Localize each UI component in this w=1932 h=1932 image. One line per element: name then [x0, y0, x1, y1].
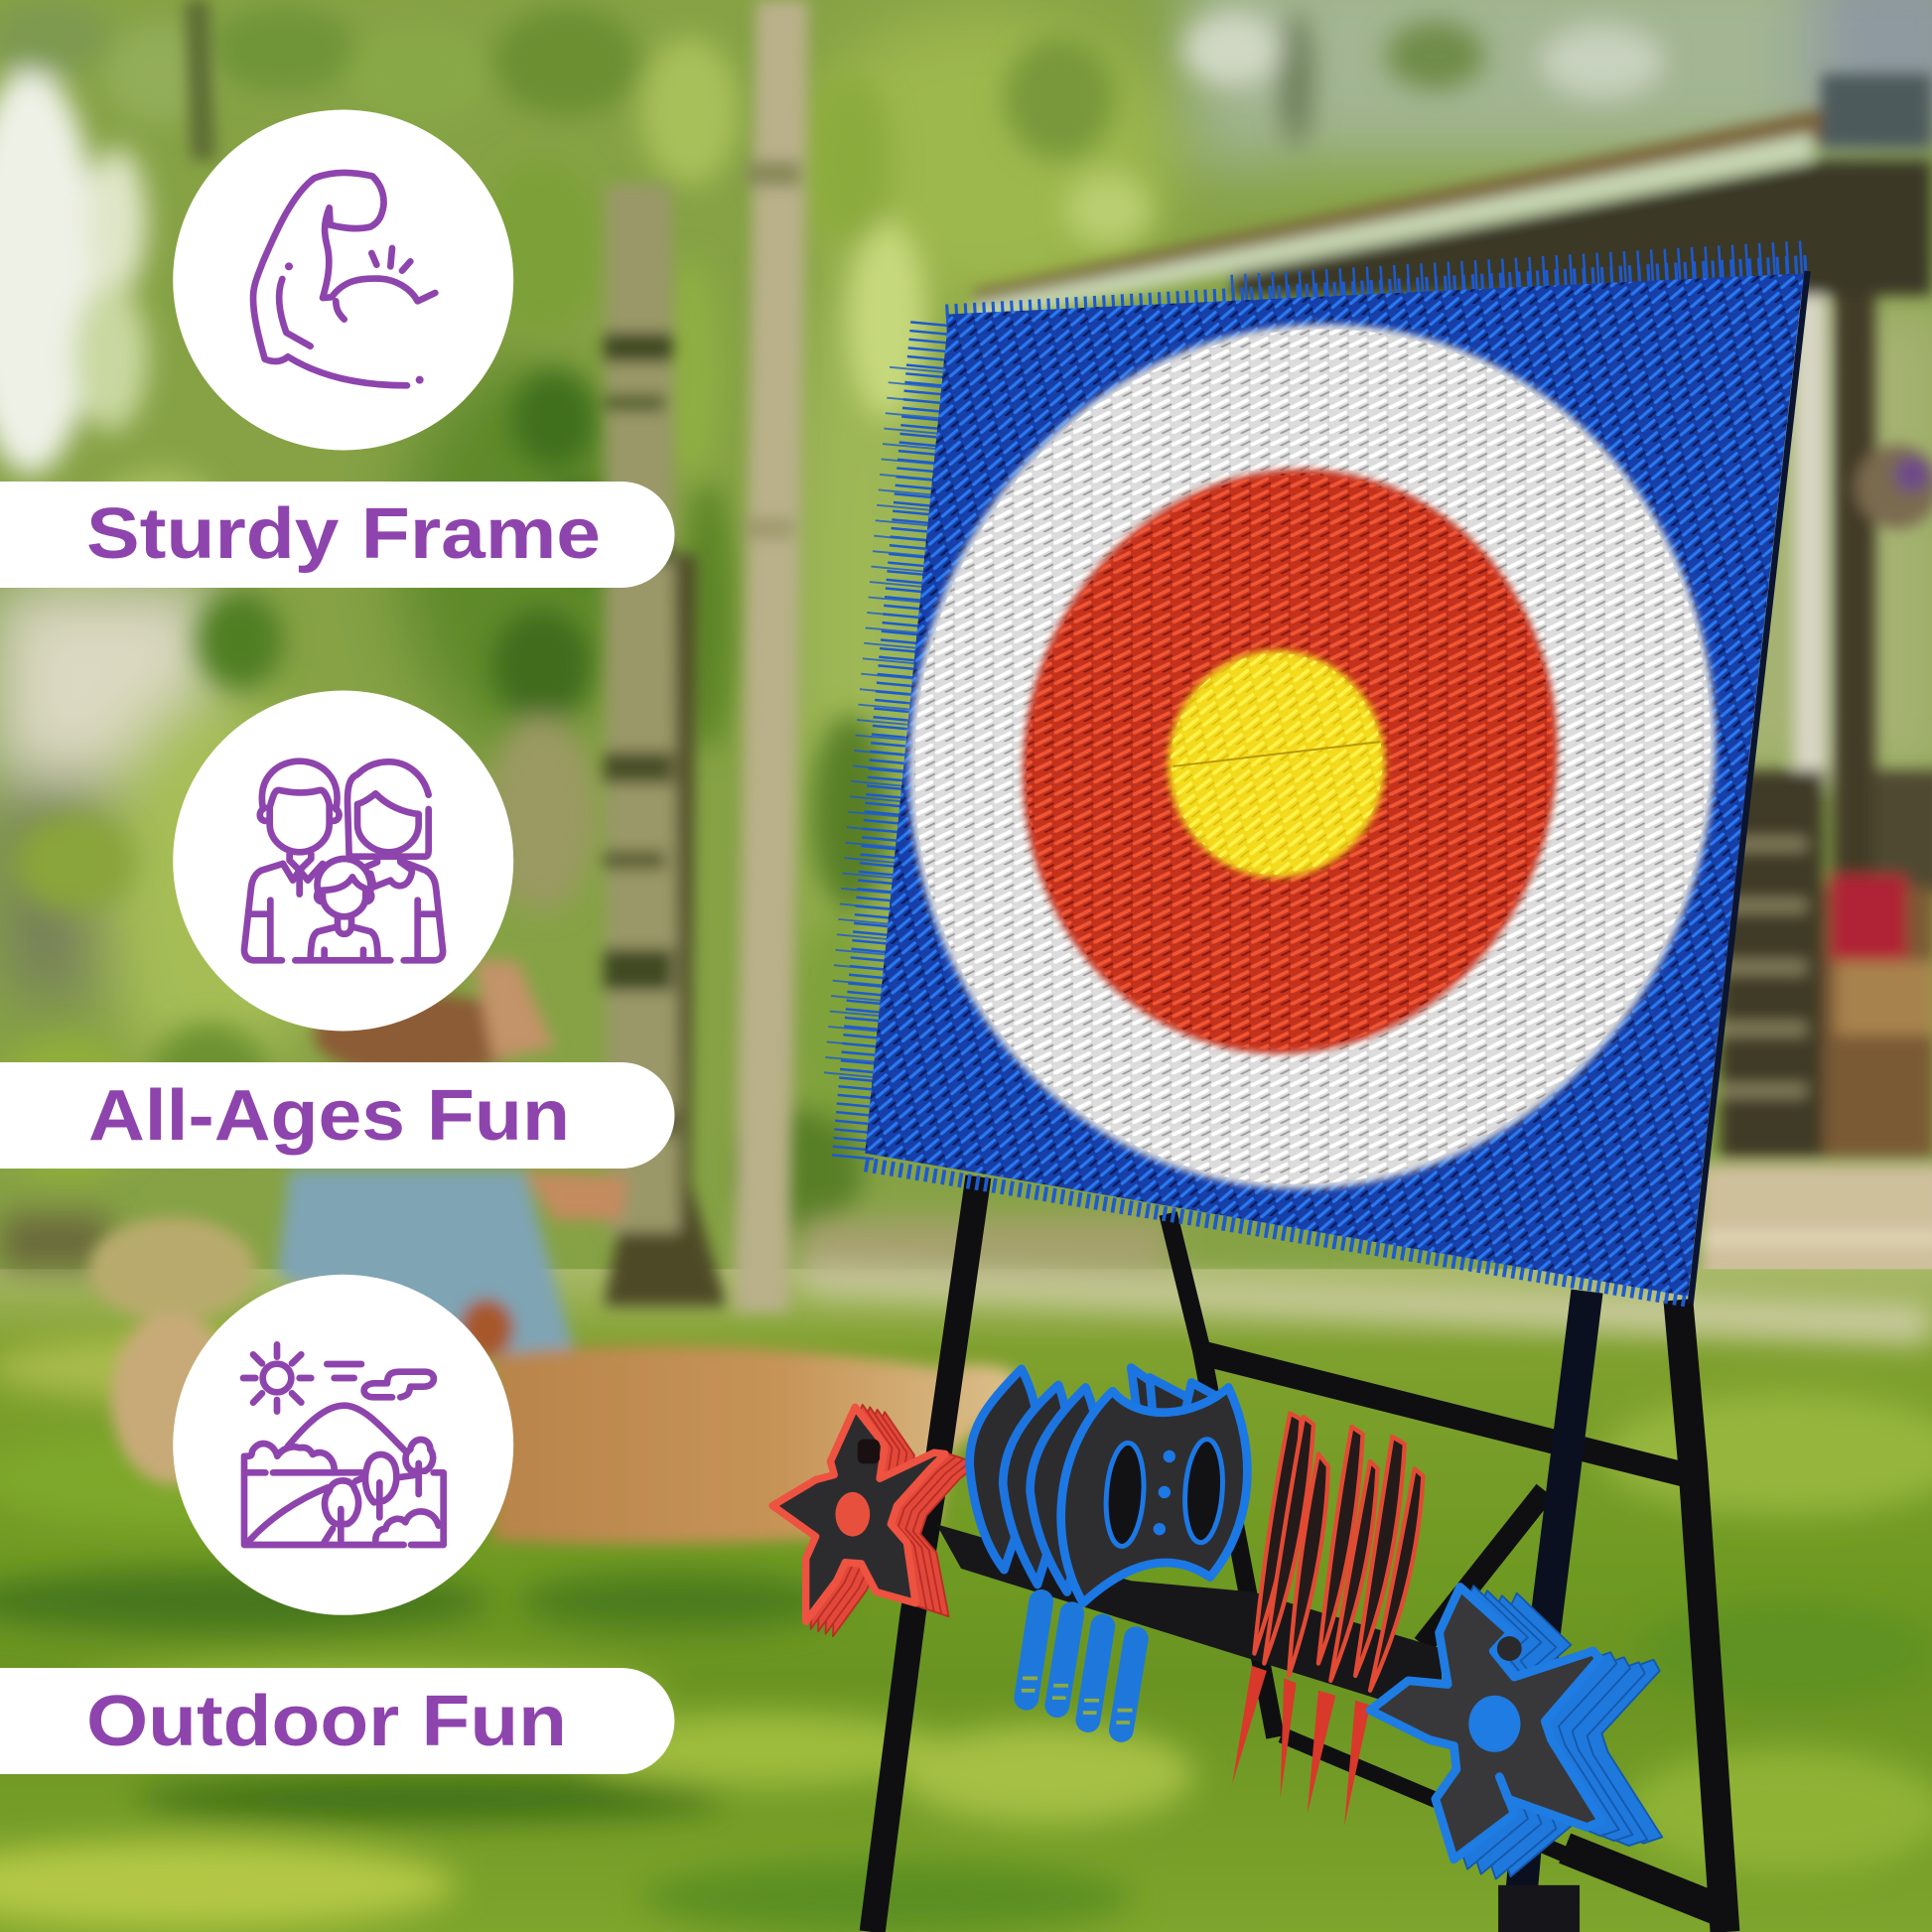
label pill: Outdoor Fun — [0, 1668, 674, 1774]
left front leg — [873, 1176, 978, 1932]
arrow fletchings — [1254, 1414, 1423, 1691]
label pill: Sturdy Frame: Sturdy Frame — [86, 494, 601, 574]
easel frame — [873, 1176, 1725, 1932]
diagonal brace — [1423, 1491, 1545, 1645]
fuzzy bristle edges — [853, 269, 1809, 1300]
red arrows — [1232, 1414, 1423, 1826]
lower rail — [1282, 1734, 1565, 1855]
upper cross brace — [1201, 1353, 1691, 1476]
label pill: Outdoor Fun: Outdoor Fun — [86, 1682, 567, 1761]
red throwing stars — [772, 1405, 978, 1636]
right leg — [1678, 1300, 1725, 1932]
leg foot clamp — [1498, 1885, 1580, 1932]
background photo: lawn — [0, 1213, 1932, 1932]
background photo: woman and dog — [88, 961, 1023, 1544]
icon disc: outdoor fun — [173, 1275, 513, 1615]
label pill: All-Ages Fun: All-Ages Fun — [88, 1076, 570, 1156]
blue paddles — [970, 1368, 1247, 1729]
red ring — [969, 419, 1611, 1104]
rear paddle plates — [970, 1368, 1232, 1591]
middle front leg — [1518, 1292, 1587, 1932]
paddle handle slots — [1022, 1678, 1133, 1723]
easel rear leg — [1169, 1213, 1276, 1737]
foliage mottling — [0, 0, 1663, 1232]
target board — [829, 249, 1809, 1304]
background photo: birch trunks — [185, 0, 808, 1312]
outer rail — [1565, 1849, 1725, 1912]
background photo: house and deck — [973, 73, 1932, 1307]
label pill: All-Ages Fun — [0, 1062, 675, 1169]
blue outer field — [865, 274, 1804, 1297]
accessory tray — [936, 1524, 1442, 1719]
icon disc: all-ages fun — [173, 691, 513, 1031]
yellow bullseye — [1169, 650, 1385, 878]
icon: family — [244, 761, 443, 960]
white ring — [829, 249, 1795, 1264]
blue throwing stars — [1370, 1586, 1662, 1879]
front paddle — [1061, 1387, 1247, 1603]
arrow tips — [1232, 1666, 1370, 1826]
icon disc: sturdy frame — [173, 109, 513, 451]
board frame edge — [1691, 271, 1808, 1304]
label pill: Sturdy Frame — [0, 482, 675, 588]
icon: landscape with sun — [243, 1344, 444, 1545]
icon: flexed arm — [253, 173, 435, 385]
paddle handles — [1027, 1601, 1136, 1729]
